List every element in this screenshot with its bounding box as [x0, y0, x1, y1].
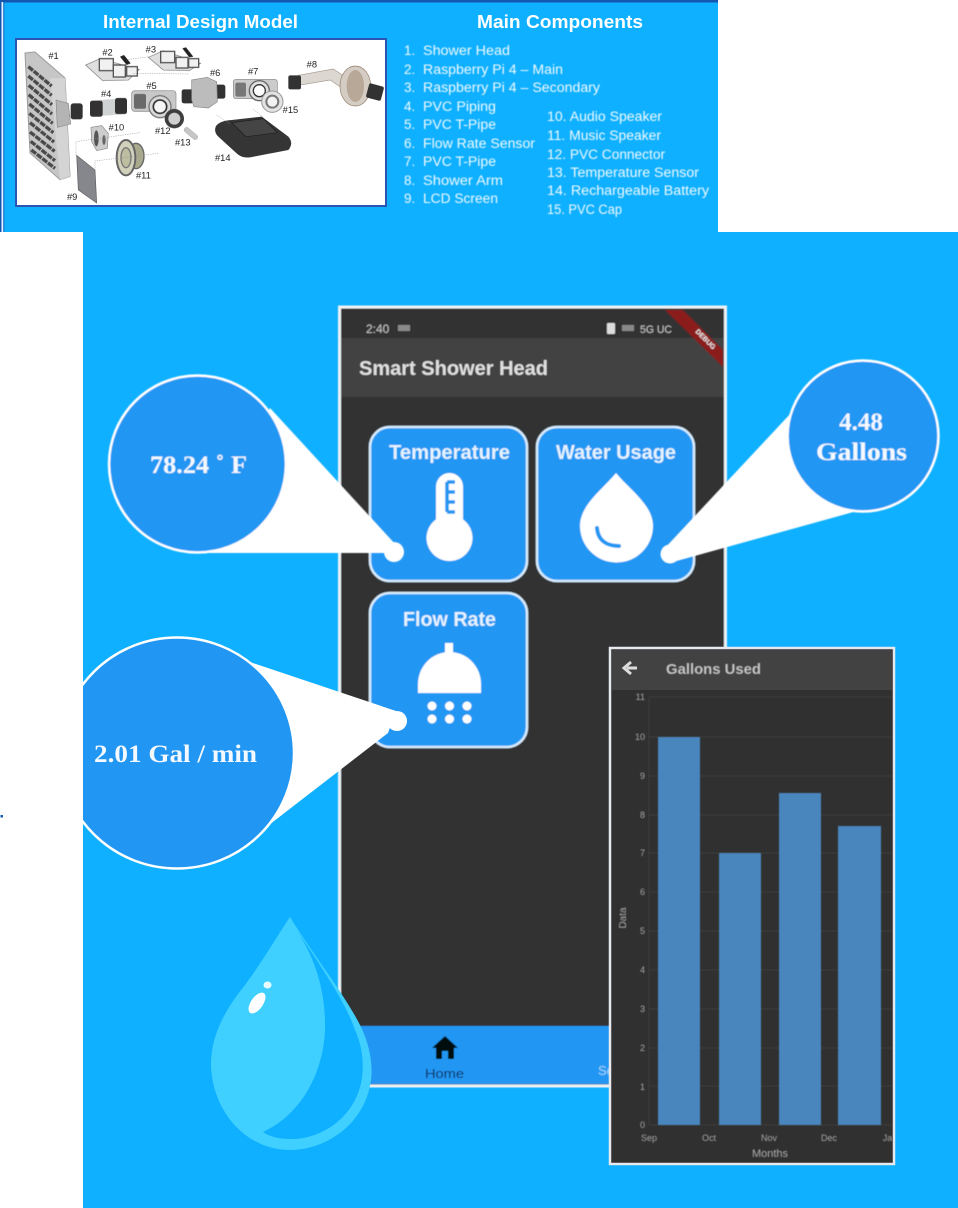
panel: app showcase background: [83, 232, 958, 1208]
components list, left column: 5.: [404, 117, 415, 132]
components list, left column: Shower Arm: [423, 173, 503, 188]
part 15: pvc cap: [262, 91, 283, 112]
illustration: water drop: [211, 917, 372, 1150]
components list, right column: 13. Temperature Sensor: [547, 165, 700, 180]
components list, right column: 12. PVC Connector: [547, 147, 666, 162]
x axis labels: Jan: [883, 1133, 897, 1143]
x axis labels: Nov: [761, 1133, 777, 1143]
icon: thermometer: [426, 473, 472, 561]
components list, left column: 4.: [404, 99, 415, 114]
card: flow rate: Flow Rate: [403, 609, 496, 631]
components list, left column: PVC T-Pipe: [423, 117, 496, 132]
part 11: music speaker: [117, 140, 144, 175]
part 9: lcd screen: [77, 155, 97, 203]
part number labels: #5: [146, 81, 157, 91]
debug ribbon: DEBUG: [694, 328, 717, 352]
bottom navigation bar: Home: [425, 1066, 464, 1081]
bars: [658, 737, 881, 1125]
components list, left column: 9.: [404, 191, 415, 206]
part number labels: #6: [210, 68, 220, 78]
part 7: t-pipe: [233, 79, 277, 101]
components list, left column: [404, 43, 600, 206]
callout: temperature reading: [109, 376, 404, 562]
y axis labels: [635, 692, 645, 1130]
part number labels: #2: [102, 48, 113, 58]
axis titles: Months: [752, 1148, 789, 1160]
heading: internal design model: Internal Design Model: [103, 12, 298, 32]
components list, left column: Flow Rate Sensor: [423, 136, 536, 151]
y axis labels: 10: [635, 732, 645, 742]
part 8: shower arm: [288, 66, 384, 106]
x axis labels: Sep: [641, 1133, 657, 1143]
components list, left column: PVC Piping: [423, 99, 496, 114]
components list, left column: Raspberry Pi 4 – Secondary: [423, 80, 600, 95]
callout: temperature reading: 78.24 ˚ F: [150, 452, 247, 479]
part 3: raspberry pi secondary: [148, 47, 201, 71]
callout: water usage reading: 4.48: [839, 409, 883, 436]
components list, left column: 8.: [404, 173, 415, 188]
callout: water usage reading: [660, 360, 938, 564]
status bar: 5G UC: [640, 324, 672, 336]
components list, left column: 1.: [404, 43, 415, 58]
components list, right column: 10. Audio Speaker: [547, 109, 663, 124]
components list, left column: 6.: [404, 136, 415, 151]
components list, left column: PVC T-Pipe: [423, 154, 496, 169]
y axis labels: 3: [640, 1004, 645, 1014]
icon: shower: [418, 643, 481, 724]
components list, left column: 3.: [404, 80, 415, 95]
part number labels: #14: [215, 153, 231, 163]
part 13: temperature sensor: [183, 126, 199, 141]
y axis labels: 6: [640, 887, 645, 897]
part number labels: #3: [146, 45, 156, 55]
phone mockup: [340, 307, 726, 1086]
part number labels: #13: [175, 138, 191, 148]
part number labels: [48, 45, 317, 202]
card: temperature: [370, 427, 527, 581]
icon: water drop: [580, 473, 653, 562]
card: flow rate: [370, 593, 527, 747]
part 14: rechargeable battery: [215, 117, 291, 157]
app bar: [341, 338, 724, 397]
part number labels: #10: [109, 123, 124, 133]
y axis labels: 9: [640, 771, 645, 781]
part number labels: #12: [155, 126, 171, 136]
components list, right column: 11. Music Speaker: [547, 128, 662, 143]
y axis labels: 1: [640, 1082, 645, 1092]
stray dot: [0, 815, 3, 818]
y axis labels: 8: [640, 810, 645, 820]
status bar: 2:40: [366, 322, 390, 336]
part 12: pvc connector: [165, 109, 184, 128]
y axis labels: 2: [640, 1043, 645, 1053]
components list, right column: [547, 109, 709, 217]
part 2: raspberry pi main: [86, 55, 139, 81]
part 6: flow rate sensor: [182, 77, 225, 108]
x axis labels: Oct: [702, 1133, 716, 1143]
chart header: Gallons Used: [666, 661, 761, 678]
components list, right column: 14. Rechargeable Battery: [547, 183, 709, 198]
chart header: [612, 650, 892, 690]
part number labels: #9: [67, 192, 77, 202]
callout: flow rate reading: [60, 638, 407, 868]
bottom navigation bar: [341, 1026, 724, 1084]
part 1: shower head plate: [25, 52, 83, 180]
icon: home: [432, 1036, 458, 1059]
y axis labels: 7: [640, 848, 645, 858]
components list, left column: 7.: [404, 154, 415, 169]
y axis labels: 4: [640, 965, 645, 975]
debug ribbon: [665, 310, 723, 367]
x axis labels: [641, 1133, 897, 1143]
axis titles: Data: [618, 907, 629, 929]
part 5: t-pipe: [132, 91, 176, 118]
highlight: [245, 990, 269, 1016]
icon: back arrow: [624, 662, 637, 674]
components list, left column: LCD Screen: [423, 191, 498, 206]
y axis labels: 0: [640, 1120, 645, 1130]
components list, left column: 2.: [404, 62, 415, 77]
part number labels: #8: [307, 60, 317, 70]
app title: Smart Shower Head: [359, 358, 548, 380]
heading: main components: Main Components: [477, 12, 643, 32]
callout: flow rate reading: 2.01 Gal / min: [94, 741, 257, 768]
status bar: [366, 322, 672, 336]
part 10: audio speaker: [91, 126, 108, 151]
panel: internal design and components: [0, 0, 718, 232]
axis titles: [618, 907, 789, 1160]
part number labels: #4: [101, 89, 111, 99]
components list, left column: Raspberry Pi 4 – Main: [423, 62, 563, 77]
part number labels: #15: [283, 105, 298, 115]
small highlight: [264, 982, 272, 988]
card: temperature: Temperature: [389, 442, 510, 464]
part 4: pvc piping: [90, 98, 127, 117]
part number labels: #1: [48, 51, 59, 61]
callout: water usage reading: Gallons: [816, 439, 907, 466]
components list, left column: Shower Head: [423, 43, 510, 58]
components list, right column: 15. PVC Cap: [547, 202, 622, 217]
card: water usage: [537, 427, 694, 581]
x axis labels: Dec: [821, 1133, 837, 1143]
chart panel: gallons used: [610, 648, 897, 1164]
card: water usage: Water Usage: [556, 442, 676, 464]
bar chart: [618, 692, 897, 1160]
bottom navigation bar: Settings: [598, 1063, 645, 1078]
y axis labels: 11: [636, 692, 645, 702]
part number labels: #7: [248, 66, 258, 76]
y axis labels: 5: [640, 926, 645, 936]
part number labels: #11: [136, 170, 151, 180]
exploded model diagram: [16, 39, 386, 206]
